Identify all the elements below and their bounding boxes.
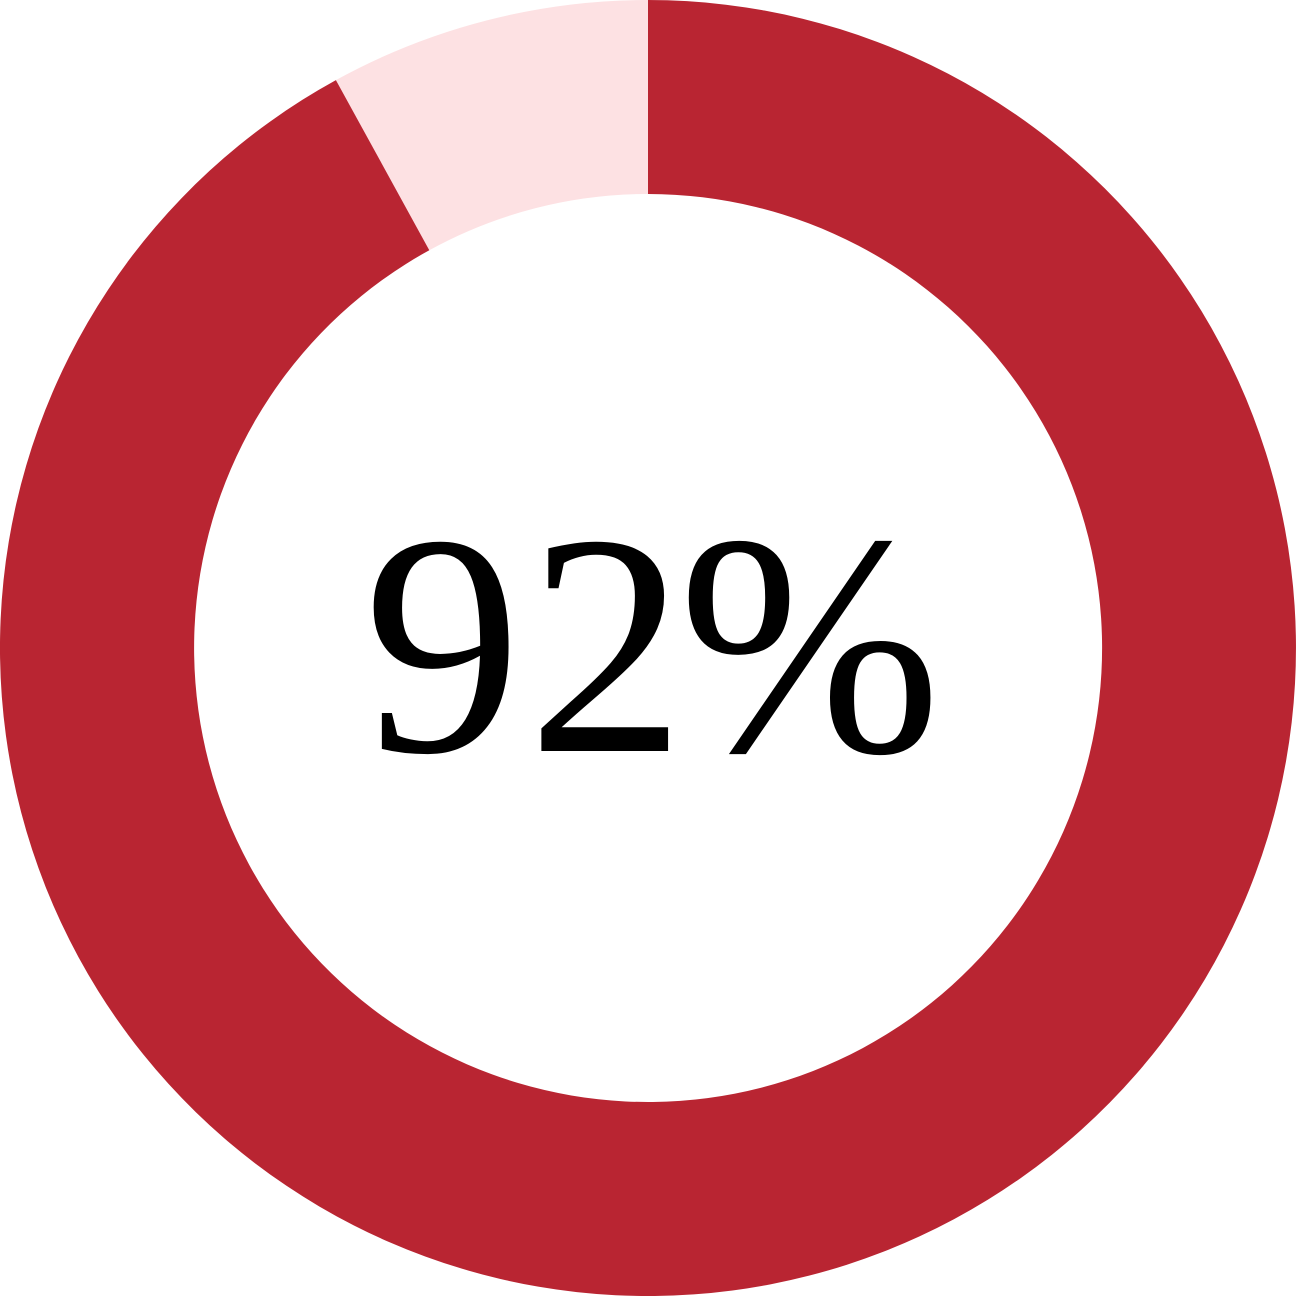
center value label: 92% <box>364 470 941 820</box>
ring segment: remaining 8% <box>336 0 648 250</box>
